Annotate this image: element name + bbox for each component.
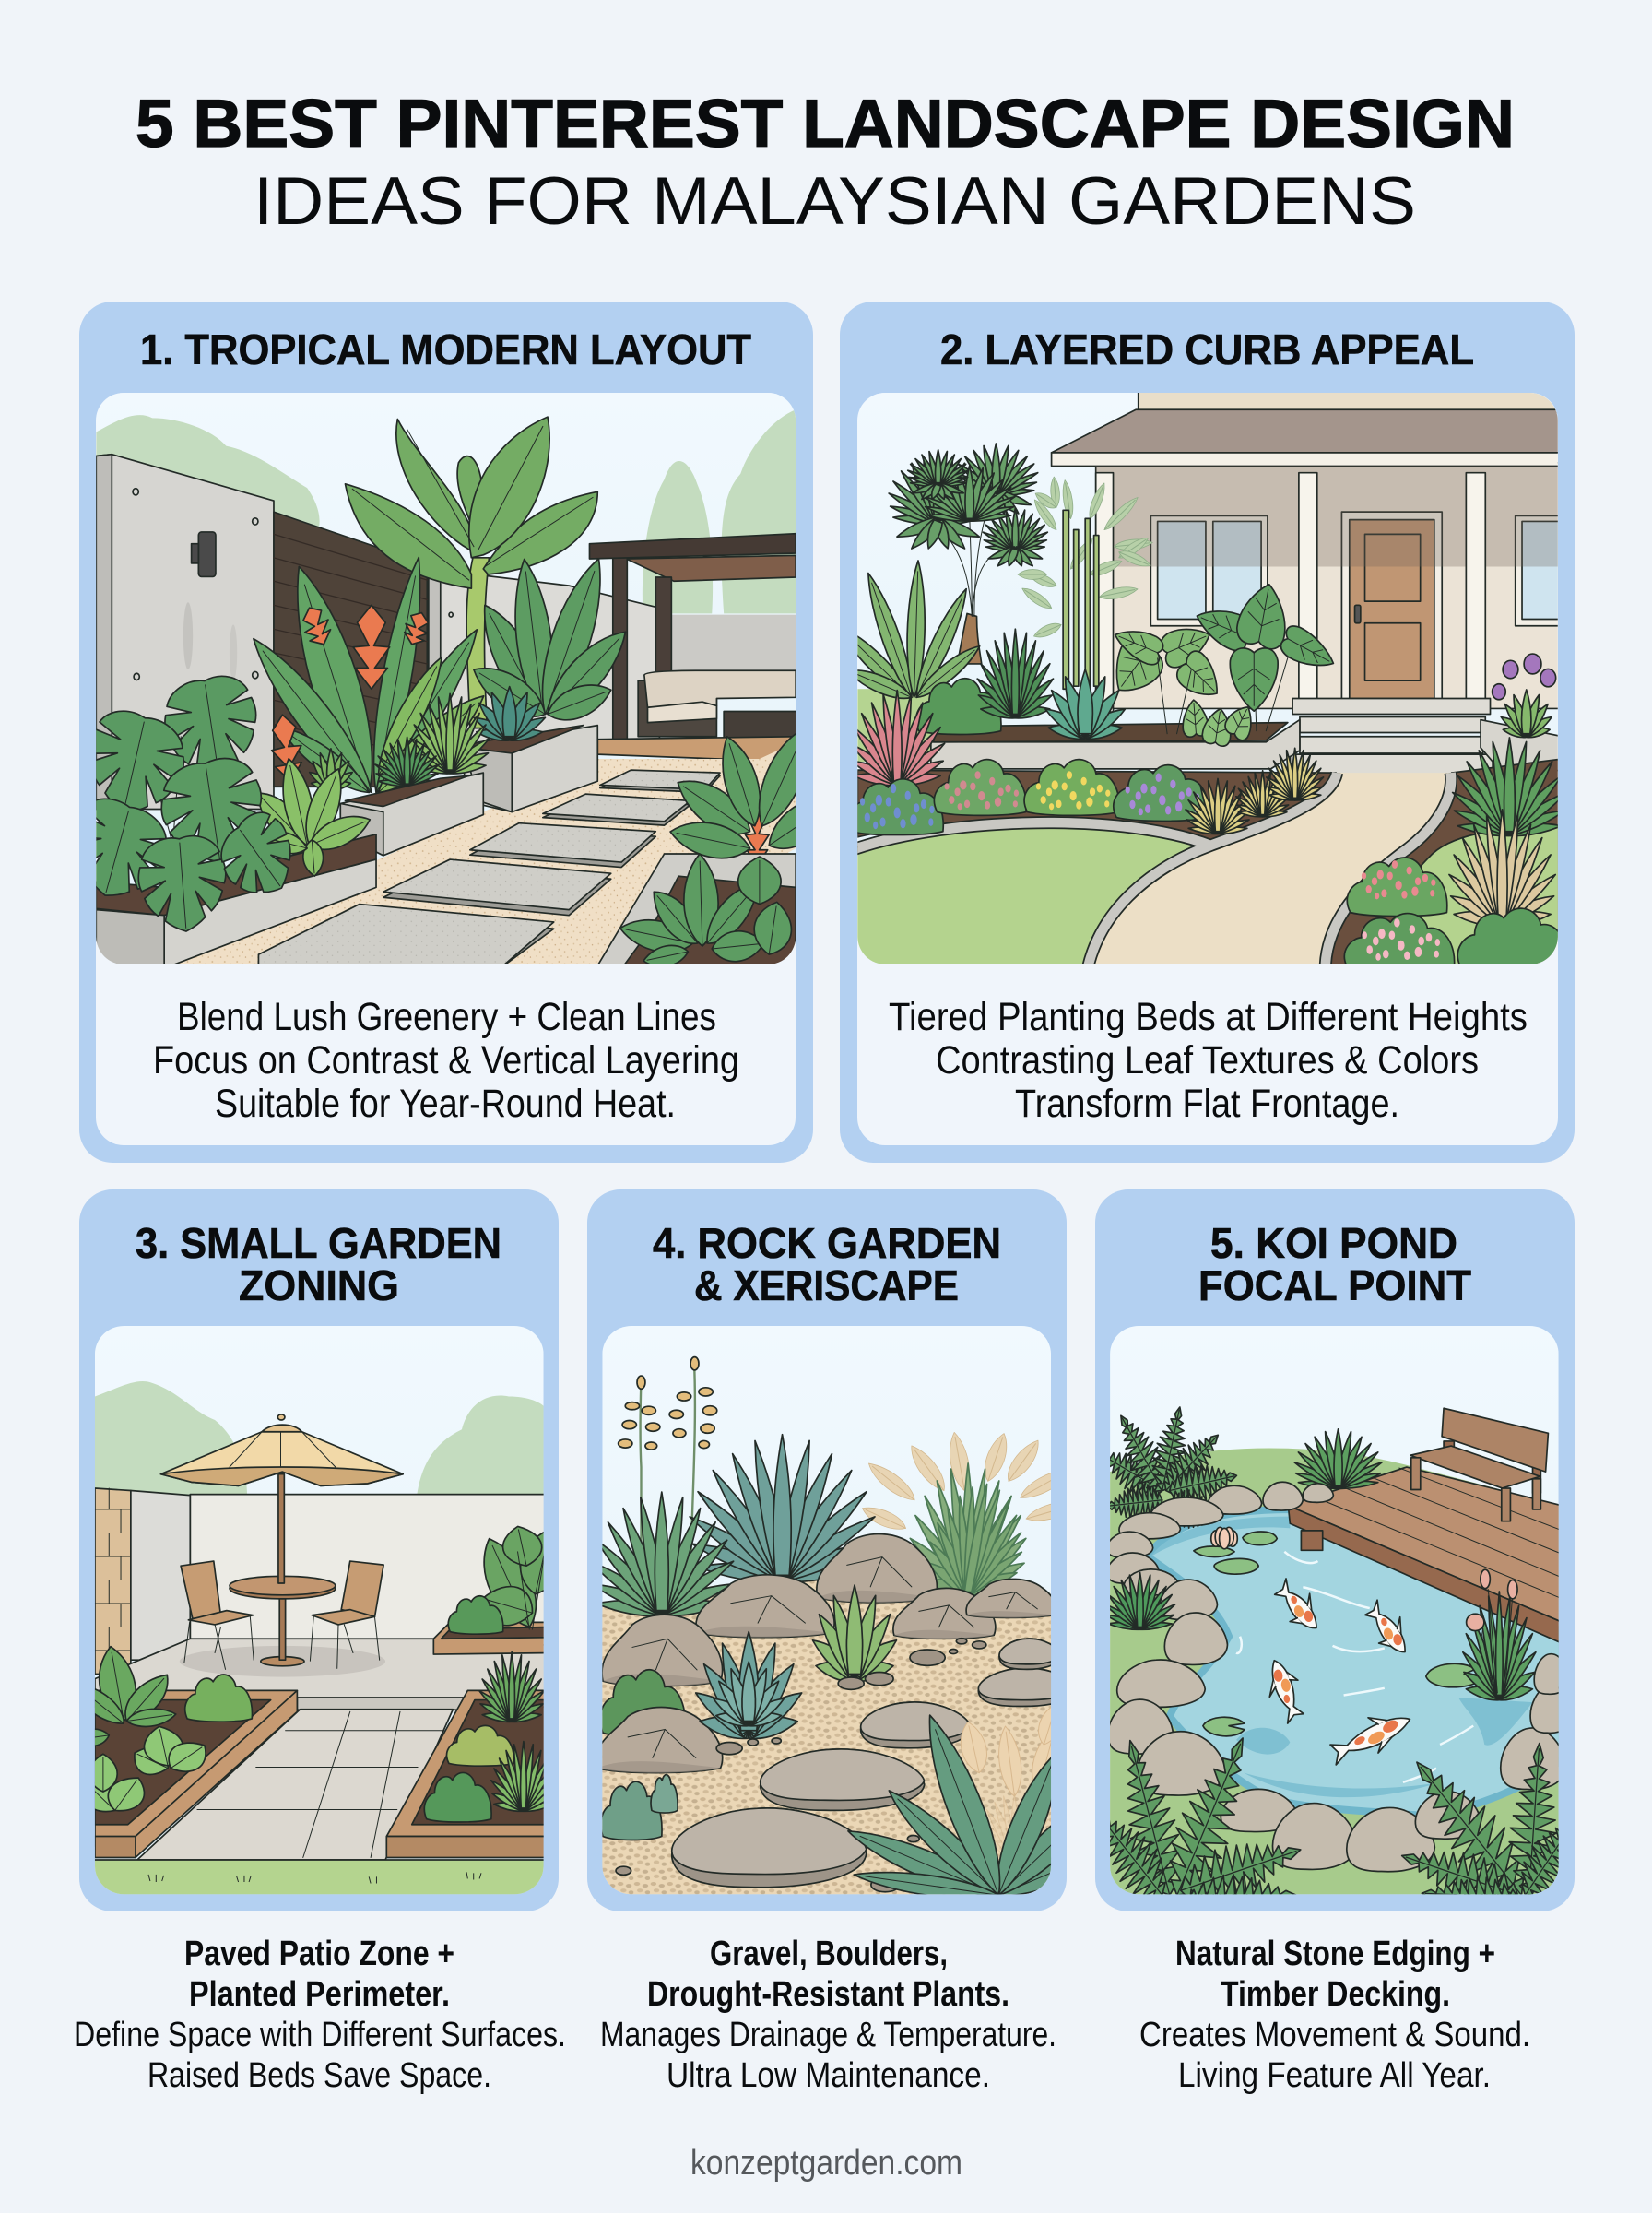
panel 2 caption: Contrasting Leaf Textures & Colors: [936, 1038, 1479, 1083]
flowering shrubs: [848, 760, 1209, 835]
blue agave large: [686, 1435, 879, 1583]
panel 4 caption: Manages Drainage & Temperature.: [600, 2016, 1056, 2054]
far wall: [441, 575, 660, 741]
purple flower plant: [1499, 690, 1553, 739]
panel: tropical modern layout: [60, 302, 843, 1163]
panel 3 illustration: [65, 1326, 571, 1898]
leafy plant: [259, 758, 371, 877]
panel 1 inner white area: [96, 393, 796, 1145]
panel: small garden zoning: [65, 1189, 571, 1911]
panel 4 card: [587, 1189, 1067, 1911]
monstera plants: [160, 736, 182, 837]
soil beds: [857, 770, 1336, 846]
shrub: [916, 679, 1001, 734]
panel 3 heading: 3. SMALL GARDEN: [136, 1219, 502, 1267]
taro leaves: [1114, 629, 1218, 695]
footer website: konzeptgarden.com: [690, 2144, 962, 2183]
bed plants: [65, 1645, 179, 1748]
porch steps: [1290, 699, 1493, 775]
left palm shrub: [857, 560, 981, 699]
left pond plant: [1103, 1573, 1176, 1630]
back right bed: [433, 1622, 550, 1654]
background trees: [96, 409, 796, 613]
panel 2 card: [840, 302, 1575, 1163]
panel 5 card: [1095, 1189, 1575, 1911]
panel 5 caption: Creates Movement & Sound.: [1139, 2016, 1530, 2054]
right grass clump: [1450, 738, 1569, 837]
pink cordyline: [848, 691, 947, 787]
stepping stones: [672, 1639, 1076, 1888]
aloe foreground: [841, 1711, 1136, 1906]
panel 4 caption: Gravel, Boulders,: [710, 1935, 948, 1973]
title: [136, 87, 1515, 239]
deck: [597, 737, 796, 762]
stone edging: [854, 773, 1451, 968]
title: 5 BEST PINTEREST LANDSCAPE DESIGN: [136, 87, 1515, 161]
green aloe: [809, 1585, 900, 1683]
panel 4 caption: Ultra Low Maintenance.: [667, 2056, 990, 2095]
gravel ground: [597, 1575, 1056, 1899]
planter far: [465, 726, 597, 812]
panel 1 caption: Suitable for Year-Round Heat.: [215, 1082, 676, 1126]
table: [261, 1657, 304, 1666]
green grass clump: [908, 1463, 1034, 1604]
grass: [1110, 1448, 1559, 1895]
panel 4 caption: [600, 1935, 1056, 2095]
bamboo leaves: [1018, 477, 1153, 641]
back wall: [669, 615, 802, 692]
panel 3 caption: Planted Perimeter.: [189, 1975, 450, 2014]
panel: koi pond focal point: [1084, 1189, 1592, 1923]
koi fish: [1259, 1572, 1416, 1771]
pergola: [626, 555, 796, 581]
panel 5 caption: [1139, 1935, 1530, 2095]
panel 3 caption: Define Space with Different Surfaces.: [74, 2016, 566, 2054]
panel 3 caption: [74, 1935, 566, 2095]
panel 4 heading: [653, 1219, 1001, 1309]
pink flower beds: [1347, 858, 1447, 917]
panel 2 caption: Tiered Planting Beds at Different Heights: [889, 995, 1528, 1039]
panel 5 caption: Living Feature All Year.: [1178, 2056, 1491, 2095]
grass strip: [91, 1860, 550, 1898]
patio floor: [95, 1639, 550, 1707]
lily pads: [1194, 1532, 1485, 1736]
foreground ferns: [1084, 1722, 1592, 1923]
panel 2 caption: Transform Flat Frontage.: [1015, 1082, 1399, 1126]
planter front: [96, 834, 376, 916]
concrete wall: [96, 455, 274, 810]
banana plant: [466, 558, 489, 728]
panel 3 card: [79, 1189, 559, 1911]
right bed: [386, 1690, 550, 1837]
panel 3 caption: Paved Patio Zone +: [184, 1935, 454, 1973]
panel: layered curb appeal: [832, 302, 1575, 1163]
left bed: [95, 1690, 297, 1846]
panel 5 caption: Natural Stone Edging +: [1175, 1935, 1495, 1973]
panel 4 illustration: [587, 1326, 1136, 1906]
walls: [190, 1495, 549, 1645]
pebbles: [616, 1639, 986, 1892]
blue agave rosette: [692, 1632, 806, 1741]
panel 2 caption: [889, 995, 1528, 1126]
planter mid: [340, 773, 483, 856]
umbrella: [278, 1474, 284, 1583]
boulders: [602, 1534, 1056, 1686]
stone ring: [1107, 1482, 1573, 1872]
panel 1 caption: [153, 995, 739, 1126]
water plant: [1461, 1592, 1537, 1701]
lotus flower: [1211, 1527, 1237, 1549]
lawn tufts: [148, 1872, 481, 1884]
panel 5 caption: Timber Decking.: [1221, 1975, 1450, 2014]
pond water: [1148, 1509, 1563, 1816]
back fern: [1094, 1402, 1239, 1534]
panel 1 illustration: [96, 393, 796, 964]
yellow grasses: [1185, 748, 1325, 834]
heliconia plant: [253, 557, 478, 793]
strelitzia cluster: [473, 559, 627, 721]
dark timber fence: [274, 512, 427, 787]
flower stalks: [640, 1359, 695, 1566]
tan plume grass: [858, 1431, 1084, 1534]
deck: [1288, 1467, 1563, 1622]
panel 3 heading: ZONING: [239, 1261, 399, 1309]
panel 2 heading: 2. LAYERED CURB APPEAL: [940, 325, 1474, 373]
panel 1 caption: Blend Lush Greenery + Clean Lines: [177, 995, 716, 1039]
panel 5 heading: [1198, 1219, 1471, 1309]
lawn: [857, 829, 1193, 964]
bamboo: [1063, 510, 1099, 689]
panel 4 heading: 4. ROCK GARDEN: [653, 1219, 1001, 1267]
background trees: [95, 1381, 544, 1497]
spiky yucca: [587, 1492, 737, 1617]
chairs: [181, 1561, 384, 1625]
front right plants: [597, 854, 796, 965]
panel 3 caption: Raised Beds Save Space.: [148, 2056, 491, 2095]
palm tree: [958, 613, 982, 664]
panel 1 heading: 1. TROPICAL MODERN LAYOUT: [140, 325, 751, 373]
walkway: [1090, 773, 1452, 968]
panel 4 heading: & XERISCAPE: [694, 1261, 959, 1309]
sofa: [638, 680, 716, 737]
panel 4 caption: Drought-Resistant Plants.: [647, 1975, 1009, 2014]
panel 1 card: [79, 302, 813, 1163]
gravel path: [171, 742, 796, 964]
panel 5 illustration: [1084, 1326, 1592, 1923]
green round shrub: [600, 1670, 686, 1737]
grey shrubs: [601, 1781, 662, 1840]
title: IDEAS FOR MALAYSIAN GARDENS: [254, 164, 1416, 239]
panel: rock garden and xeriscape: [587, 1189, 1136, 1911]
tan plumes foreground: [956, 1701, 1068, 1862]
stepping stones: [258, 770, 720, 971]
house: [1052, 390, 1565, 712]
retaining wall: [931, 720, 1300, 769]
panel 2 illustration: [832, 390, 1569, 973]
panel 1 caption: Focus on Contrast & Vertical Layering: [153, 1038, 739, 1083]
panel 2 inner white area: [857, 393, 1558, 1145]
right planter: [1480, 719, 1558, 771]
wall lamp: [192, 532, 216, 576]
panel 3 heading: [136, 1219, 502, 1309]
panel 5 heading: 5. KOI POND: [1210, 1219, 1457, 1267]
panel 5 heading: FOCAL POINT: [1198, 1261, 1471, 1309]
bench: [1410, 1408, 1548, 1521]
